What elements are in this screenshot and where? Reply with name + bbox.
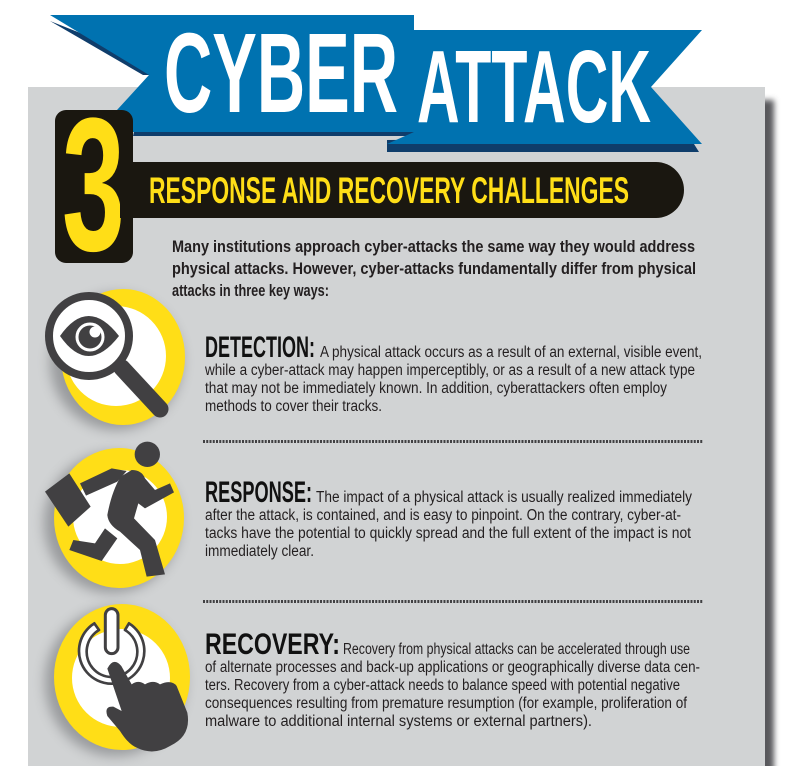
detection text: A physical attack occurs as a result of an external, visible event, <box>320 344 702 361</box>
intro paragraph <box>172 238 696 300</box>
recovery text: malware to additional internal systems or external partners). <box>205 713 592 730</box>
response text: after the attack, is contained, and is easy to pinpoint. On the contrary, cyber-at- <box>205 507 681 524</box>
response text <box>205 476 692 560</box>
response text: RESPONSE: <box>205 476 312 509</box>
panel shadow <box>40 100 774 766</box>
section heading bar <box>120 162 684 218</box>
icon: hand pressing power button <box>45 604 190 756</box>
recovery text: ters. Recovery from a cyber-attack needs to balance speed with potential negative <box>205 677 680 694</box>
recovery text: RECOVERY: <box>205 628 340 661</box>
title ribbon <box>50 15 702 152</box>
detection text: methods to cover their tracks. <box>205 398 382 415</box>
response text: immediately clear. <box>205 543 314 560</box>
recovery text: consequences resulting from premature resumption (for example, proliferation of <box>205 695 688 712</box>
icon: running businessman <box>44 442 184 593</box>
section number tab: 3 <box>62 79 125 291</box>
detection text <box>204 331 702 415</box>
intro paragraph: Many institutions approach cyber-attacks the same way they would address <box>172 238 695 256</box>
detection text: that may not be immediately known. In addition, cyberattackers often employ <box>205 380 667 397</box>
intro paragraph: physical attacks. However, cyber-attacks fundamentally differ from physical <box>172 260 696 278</box>
detection text: while a cyber-attack may happen imperceptibly, or as a result of a new attack type <box>204 362 695 379</box>
title: CYBER <box>164 10 398 136</box>
icon: magnifying glass with eye <box>49 289 185 430</box>
response text: tacks have the potential to quickly spread and the full extent of the impact is not <box>205 525 692 542</box>
section number tab <box>55 79 133 291</box>
intro paragraph: attacks in three key ways: <box>172 282 329 300</box>
response text: The impact of a physical attack is usually realized immediately <box>316 489 692 506</box>
detection text: DETECTION: <box>205 331 315 364</box>
recovery text: of alternate processes and back-up applications or geographically diverse data cen- <box>205 659 700 676</box>
recovery text <box>205 628 700 730</box>
recovery text: Recovery from physical attacks can be accelerated through use <box>343 641 690 658</box>
